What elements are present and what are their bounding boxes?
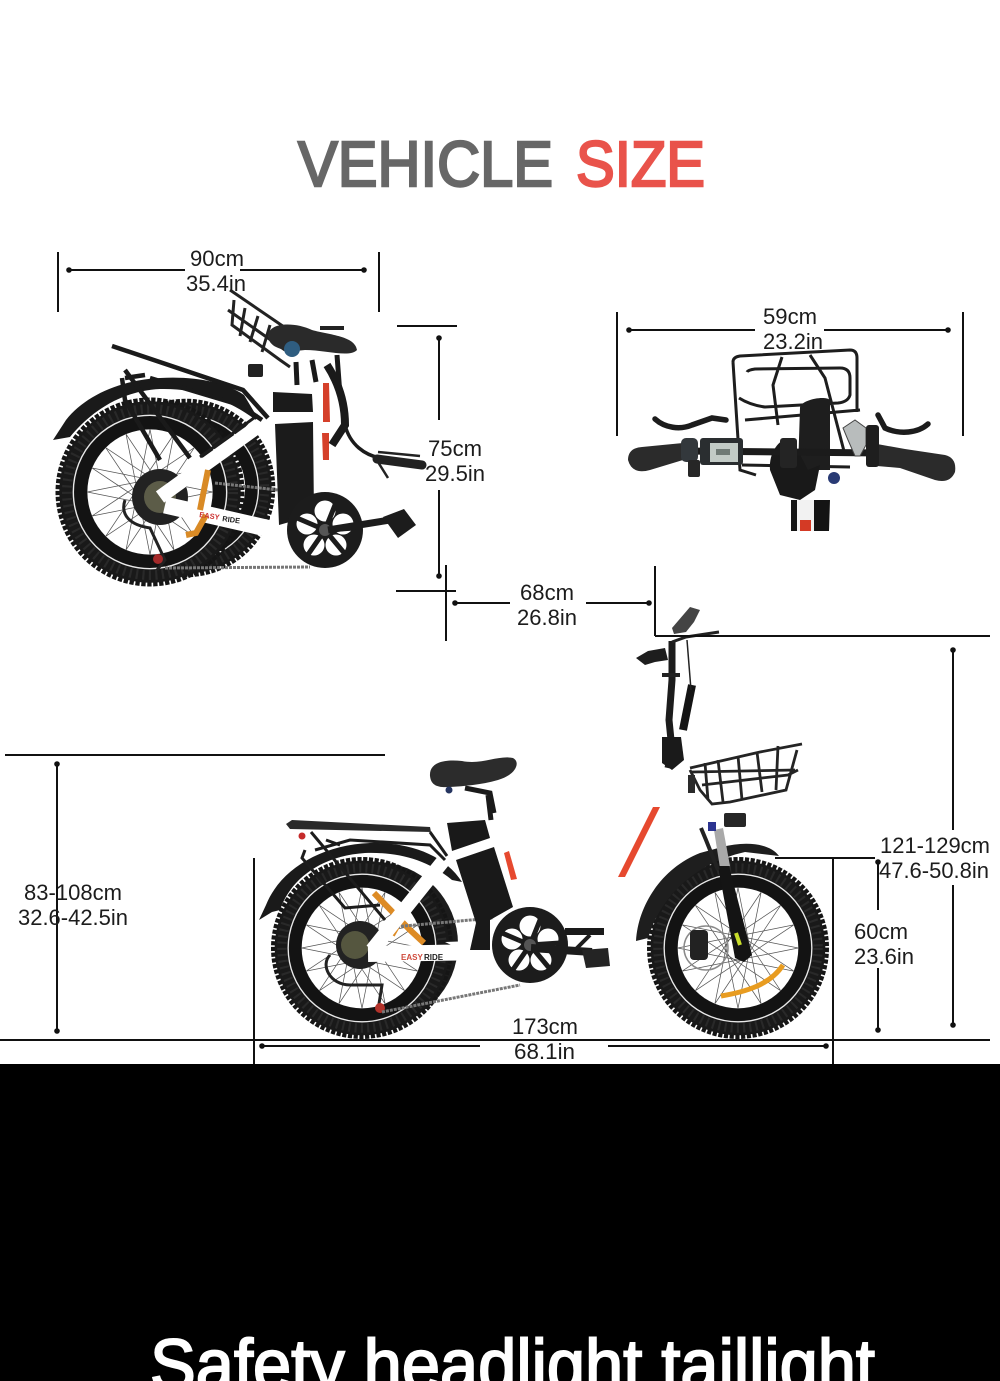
left grip: [628, 443, 683, 471]
rear rack: [286, 820, 431, 832]
front basket top view: [733, 350, 860, 475]
handlebar top view photo: [628, 350, 955, 531]
stem and handlebar: [636, 607, 719, 770]
dimension: folded depth 68cm: 26.8in: [517, 605, 577, 630]
dimension: handlebar width 59cm: [617, 304, 963, 436]
dimension: handlebar width 59cm: 59cm: [763, 304, 817, 329]
dimension: folded depth 68cm: [452, 566, 655, 636]
saddle folded: [268, 325, 357, 354]
title: VEHICLE: [298, 128, 553, 200]
dimension: folded length 90cm: [58, 246, 379, 312]
dimension: total height 121-129cm: 121-129cm: [880, 833, 990, 858]
front wheel: [650, 860, 826, 1036]
far wheel: [99, 401, 273, 575]
bar: [683, 451, 880, 453]
headlight: [724, 813, 746, 827]
main bike photo: [259, 607, 826, 1036]
dimension: folded length 90cm: 90cm: [190, 246, 244, 271]
chain: [165, 483, 310, 568]
dimension: total height 121-129cm: [655, 636, 990, 1028]
near wheel: [58, 400, 242, 584]
right grip: [877, 444, 955, 481]
dimension: saddle height 83-108cm: [5, 755, 385, 1034]
title: [298, 128, 705, 200]
rear fender: [259, 843, 462, 920]
dimension: folded depth 68cm: 68cm: [520, 580, 574, 605]
folded bike photo: [53, 290, 422, 584]
frame logo: [401, 953, 444, 962]
dimension: wheel height 60cm: [775, 858, 914, 1033]
folded frame logo: EASY: [199, 510, 220, 522]
dimension: total length 173cm: 68.1in: [514, 1039, 575, 1064]
dimension: saddle height 83-108cm: 32.6-42.5in: [18, 905, 128, 930]
left lever: [655, 418, 726, 428]
front fender: [636, 844, 779, 941]
dimension: saddle height 83-108cm: 83-108cm: [24, 880, 122, 905]
dimension: total length 173cm: [0, 858, 990, 1064]
fold stem and strap: [296, 355, 340, 395]
display folded: [320, 326, 344, 330]
control pad: [681, 438, 698, 462]
front hardware: [684, 926, 783, 996]
battery: [273, 392, 314, 525]
frame: white body: [368, 768, 718, 966]
crank and pedal: [531, 928, 610, 968]
chainring: [492, 907, 568, 983]
red seat-tube stripe: [504, 851, 517, 880]
head block: [688, 775, 695, 793]
red stripes: [322, 383, 330, 460]
chain: [382, 918, 520, 1012]
orange brace: [186, 470, 208, 535]
basket folded: [228, 290, 290, 367]
dimension: handlebar width 59cm: 23.2in: [763, 329, 823, 354]
chainring folded: [287, 492, 363, 568]
battery: [447, 820, 513, 950]
dimension: wheel height 60cm: 60cm: [854, 919, 908, 944]
saddle: [430, 757, 517, 787]
title: SIZE: [576, 128, 705, 200]
dimension: total length 173cm: 173cm: [512, 1014, 578, 1039]
right lever: [878, 415, 928, 432]
tail light: [298, 832, 306, 840]
handlebar folded: [345, 425, 421, 466]
silver shifter: [843, 420, 866, 456]
black band: [0, 1064, 1000, 1381]
orange rear brace: [374, 893, 424, 943]
front basket: [690, 744, 802, 804]
rear fender: [53, 378, 262, 440]
frame logo: RIDE: [424, 953, 444, 962]
rear wheel: [274, 860, 450, 1036]
blue switch: [828, 472, 840, 484]
front fork: [701, 822, 752, 962]
frame logo: EASY: [401, 953, 423, 962]
red down-tube stripe: [618, 807, 660, 877]
frame: white tubes: [160, 368, 342, 547]
dimension: folded length 90cm: 35.4in: [186, 271, 246, 296]
seat post: [465, 788, 494, 820]
dimension: folded height 75cm: [396, 326, 485, 641]
LCD display: [700, 438, 743, 465]
cassette and hub: [124, 469, 188, 570]
rear cassette: [326, 921, 385, 1013]
crank and pedal folded: [328, 520, 390, 530]
dimension: total height 121-129cm: 47.6-50.8in: [879, 858, 989, 883]
dimension: folded height 75cm: 75cm: [428, 436, 482, 461]
dimension: wheel height 60cm: 23.6in: [854, 944, 914, 969]
folded bike photo: RIDE: [222, 514, 241, 525]
dimension: folded height 75cm: 29.5in: [425, 461, 485, 486]
stem: [791, 500, 830, 531]
rear rack: [112, 346, 268, 460]
headlight folded: [248, 364, 263, 377]
rear tyre depth: [294, 862, 458, 1026]
